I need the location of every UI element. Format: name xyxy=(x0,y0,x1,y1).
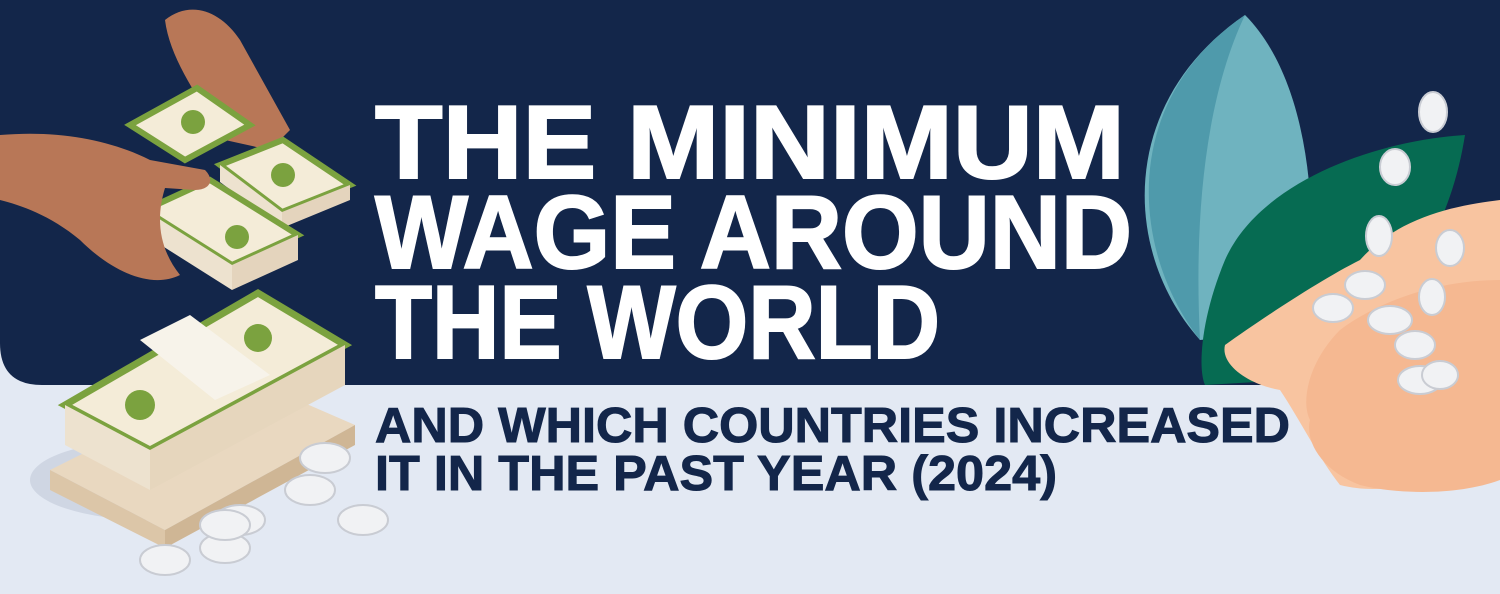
illustration: hands with money xyxy=(0,10,350,290)
subtitle xyxy=(375,399,1290,501)
illustration: open hands with coins xyxy=(1224,92,1500,492)
title: WAGE AROUND xyxy=(375,175,1132,291)
title: THE MINIMUM xyxy=(375,85,1125,201)
illustration: leaves xyxy=(1145,15,1465,385)
navy header panel xyxy=(0,0,1500,385)
subtitle: AND WHICH COUNTRIES INCREASED xyxy=(375,399,1290,453)
illustration: money stack and coins xyxy=(30,293,388,575)
title: THE WORLD xyxy=(375,265,940,381)
title xyxy=(375,85,1132,381)
subtitle: IT IN THE PAST YEAR (2024) xyxy=(375,447,1057,501)
